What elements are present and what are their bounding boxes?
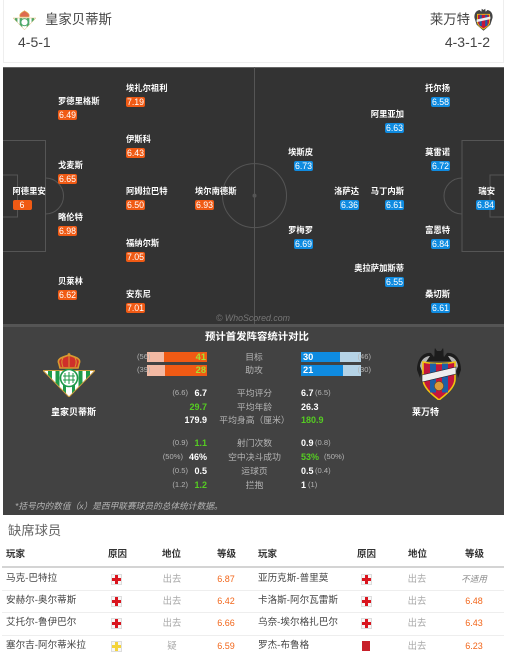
table row 3: 艾托尔-鲁伊巴尔	[6, 617, 76, 628]
table row 1: 马克-巴特拉	[6, 573, 57, 584]
player: 埃扎尔祖利: 7.19	[127, 97, 144, 107]
bar: Levante assists: 21	[303, 365, 313, 375]
player: 奥拉萨加斯蒂: 奥拉萨加斯蒂	[354, 263, 404, 273]
table row 4: 罗杰-布鲁格	[258, 640, 309, 651]
panel: match header	[3, 0, 504, 63]
stat row: average height: 平均身高（厘米）	[219, 415, 290, 425]
stat row: dribbles: 0.5	[301, 466, 314, 476]
player: 桑切斯: 6.61	[432, 303, 449, 313]
player: 洛萨达	[334, 186, 359, 210]
table row 2: 6.48	[465, 596, 483, 606]
player: 阿德里安	[12, 186, 46, 210]
table header: 地位	[162, 549, 181, 560]
stat row: aerial duels	[163, 452, 344, 462]
player: 阿姆拉巴特: 6.50	[127, 200, 144, 210]
table row 1: 不适用	[461, 574, 487, 584]
bar: Levante goals	[301, 352, 361, 362]
player: 莫雷诺: 莫雷诺	[425, 147, 450, 157]
stat row: average height: 179.9	[184, 415, 207, 425]
player: 罗德里格斯	[58, 96, 100, 120]
bar: Levante goals: 30	[303, 352, 313, 362]
player: 罗梅罗: 6.69	[295, 239, 312, 249]
player: 桑切斯: 桑切斯	[425, 289, 450, 299]
table row 4	[6, 640, 483, 652]
watermark: © WhoScored.com	[216, 313, 290, 323]
player: 罗德里格斯: 6.49	[59, 110, 76, 120]
player: 埃尔南德斯	[195, 186, 236, 210]
stat row: tackles	[172, 480, 317, 490]
stat row: shots on target: 0.9	[301, 438, 314, 448]
stat row: average age: 平均年龄	[237, 402, 272, 412]
stat row: average rating: (6.6)	[172, 388, 188, 397]
team name: Betis: 皇家贝蒂斯	[45, 12, 112, 27]
player: 桑切斯	[425, 289, 450, 313]
formation: Levante: 4-3-1-2	[445, 34, 490, 50]
stat row: average rating: 平均评分	[237, 388, 272, 398]
stats title: 预计首发阵容统计对比	[205, 332, 309, 343]
team name: Levante: 莱万特	[430, 12, 470, 27]
player: 埃扎尔祖利: 埃扎尔祖利	[126, 83, 168, 93]
player: 伊斯科: 伊斯科	[126, 134, 151, 144]
player: 托尔扬	[425, 83, 450, 107]
stat row: dribbles: 运球页	[241, 466, 268, 476]
player: 马丁内斯: 6.61	[386, 200, 403, 210]
player: 洛萨达: 6.36	[341, 200, 358, 210]
stat row: goals: 目标	[245, 352, 263, 362]
table header	[2, 548, 504, 568]
stat row: aerial duels: 53%	[301, 452, 319, 462]
pitch markings	[3, 67, 504, 324]
stat row: tackles: 拦抱	[246, 480, 263, 490]
team name: Levante: 莱万特	[412, 407, 439, 417]
stat row: dribbles: (0.4)	[315, 466, 331, 475]
footnote: *括号内的数值（x）是西甲联赛球员的总体统计数据。	[15, 501, 223, 511]
table row 4: 6.59	[217, 641, 235, 651]
player: 安东尼	[126, 289, 151, 313]
stat row: average height: 180.9	[301, 415, 324, 425]
player: 埃扎尔祖利	[126, 83, 168, 107]
player: 略伦特: 6.98	[59, 226, 76, 236]
stat row: tackles: 1.2	[194, 480, 207, 490]
player: 福纳尔斯: 福纳尔斯	[126, 238, 159, 248]
panel: pitch	[3, 67, 504, 325]
player: 贝莱林	[58, 276, 83, 300]
table row 4: 疑	[167, 640, 177, 651]
player: 阿德里安: 6	[20, 200, 24, 210]
icon: Real Betis crest	[43, 353, 95, 397]
player: 阿姆拉巴特: 阿姆拉巴特	[126, 186, 168, 196]
table row 2: 出去	[163, 595, 181, 606]
player: 埃斯皮: 6.73	[295, 161, 312, 171]
row dividers	[2, 590, 504, 636]
table row 2: 出去	[408, 595, 426, 606]
player: 安东尼: 安东尼	[126, 289, 151, 299]
player: 阿德里安: 阿德里安	[12, 186, 46, 196]
stat row: aerial duels: 空中决斗成功	[228, 452, 281, 462]
stat row: tackles: (1)	[308, 480, 317, 489]
stat row: shots on target: 1.1	[194, 438, 207, 448]
player: 阿里亚加: 阿里亚加	[371, 109, 404, 119]
table row 1: 出去	[408, 573, 426, 584]
table row 3: 6.43	[465, 618, 483, 628]
stat row: average age: 29.7	[189, 402, 207, 412]
bar: Betis assists	[147, 365, 207, 376]
stat row: assists: 助攻	[245, 365, 263, 375]
stat row: shots on target	[172, 438, 331, 448]
formation: Betis: 4-5-1	[18, 34, 51, 50]
player: 戈麦斯	[58, 160, 83, 184]
table header: 地位	[408, 549, 427, 560]
stat row: assists: (39)	[137, 365, 151, 374]
icon: Real Betis crest small	[13, 10, 36, 30]
stat row: shots on target: 射门次数	[237, 438, 272, 448]
stat row: tackles: 1	[301, 480, 306, 490]
stat row: average age	[189, 402, 319, 412]
table row 2: 卡洛斯-阿尔瓦雷斯	[258, 595, 338, 606]
player: 富恩特: 富恩特	[425, 225, 450, 235]
stat row: assists	[137, 365, 371, 376]
table row 1: 出去	[163, 573, 181, 584]
icon: Levante crest small	[474, 8, 493, 31]
table row 4: 出去	[408, 640, 426, 651]
stat row: dribbles: 0.5	[194, 466, 207, 476]
table row 1: 亚历克斯-普里莫	[258, 573, 328, 584]
player: 贝莱林: 6.62	[59, 290, 76, 300]
player: 阿里亚加: 6.63	[386, 123, 403, 133]
player: 戈麦斯: 6.65	[59, 174, 76, 184]
stat row: goals: (46)	[357, 352, 371, 361]
player: 罗德里格斯: 罗德里格斯	[58, 96, 100, 106]
stat row: aerial duels: (50%)	[324, 452, 344, 461]
player: 埃尔南德斯: 6.93	[196, 200, 213, 210]
bar: Betis assists: 28	[196, 365, 206, 375]
stat row: average rating: 6.7	[194, 388, 207, 398]
player: 马丁内斯: 马丁内斯	[371, 186, 404, 196]
player: 伊斯科: 6.43	[127, 148, 144, 158]
player: 瑞安	[476, 186, 495, 210]
player: 莫雷诺	[425, 147, 450, 171]
player: 瑞安: 瑞安	[478, 186, 495, 196]
table row 2: 6.42	[217, 596, 235, 606]
player: 富恩特	[425, 225, 450, 249]
table header: 等级	[465, 549, 484, 560]
table header: 原因	[357, 549, 376, 560]
player: 托尔扬: 6.58	[432, 97, 449, 107]
stat row: goals: (56)	[137, 352, 151, 361]
panel: lineup stats comparison	[3, 324, 504, 515]
stat row: goals	[137, 352, 371, 362]
player: 安东尼: 7.01	[127, 303, 144, 313]
player: 伊斯科	[126, 134, 151, 158]
stat row: average age: 26.3	[301, 402, 319, 412]
table header: 玩家	[6, 549, 25, 560]
player: 埃斯皮: 埃斯皮	[288, 147, 313, 157]
player: 略伦特	[58, 212, 83, 236]
player: 阿姆拉巴特	[126, 186, 168, 210]
player: 贝莱林: 贝莱林	[58, 276, 83, 286]
player: 略伦特: 略伦特	[58, 212, 83, 222]
player: 埃尔南德斯: 埃尔南德斯	[195, 186, 236, 196]
table row 2	[6, 594, 483, 607]
stat row: shots on target: (0.8)	[315, 438, 331, 447]
stat row: tackles: (1.2)	[172, 480, 188, 489]
player: 奥拉萨加斯蒂	[354, 263, 404, 287]
bar: Betis goals: 41	[196, 352, 206, 362]
team name: Betis: 皇家贝蒂斯	[51, 407, 96, 417]
stat row: assists: (30)	[357, 365, 371, 374]
table row 3: 出去	[163, 617, 181, 628]
stat row: aerial duels: (50%)	[163, 452, 183, 461]
player: 福纳尔斯: 7.05	[127, 252, 144, 262]
heading: missing players: 缺席球员	[8, 523, 61, 538]
table row 3	[6, 616, 483, 629]
table row 4: 塞尔吉-阿尔蒂米拉	[6, 640, 86, 651]
player: 奥拉萨加斯蒂: 6.55	[386, 277, 403, 287]
table row 1	[6, 572, 488, 585]
player: 洛萨达: 洛萨达	[334, 186, 359, 196]
table row 1: 6.87	[217, 574, 235, 584]
table row 2: 安赫尔-奥尔蒂斯	[6, 595, 76, 606]
table row 3: 乌奈-埃尔格扎巴尔	[258, 617, 338, 628]
player: 福纳尔斯	[126, 238, 159, 262]
table header: 玩家	[258, 549, 277, 560]
bar: Levante assists	[301, 365, 361, 376]
stat row: dribbles: (0.5)	[172, 466, 188, 475]
player: 托尔扬: 托尔扬	[425, 83, 450, 93]
table row 4: 6.23	[465, 641, 483, 651]
stat row: average rating	[172, 388, 331, 398]
stat row: average rating: 6.7	[301, 388, 314, 398]
player: 马丁内斯	[371, 186, 404, 210]
player: 罗梅罗: 罗梅罗	[288, 225, 313, 235]
table row 3: 出去	[408, 617, 426, 628]
player: 富恩特: 6.84	[432, 239, 449, 249]
table row 3: 6.66	[217, 618, 235, 628]
player: 埃斯皮	[288, 147, 313, 171]
player: 阿里亚加	[371, 109, 404, 133]
stat row: aerial duels: 46%	[189, 452, 207, 462]
icon: Levante crest	[417, 348, 461, 400]
stat row: average rating: (6.5)	[315, 388, 331, 397]
player: 戈麦斯: 戈麦斯	[58, 160, 83, 170]
player: 莫雷诺: 6.72	[432, 161, 449, 171]
player: 罗梅罗	[288, 225, 313, 249]
stat row: shots on target: (0.9)	[172, 438, 188, 447]
table header: 原因	[108, 549, 127, 560]
bar: Betis goals	[147, 352, 207, 362]
player: 瑞安: 6.84	[477, 200, 494, 210]
stat row: dribbles	[172, 466, 331, 476]
stat row: average height	[184, 415, 324, 425]
table header: 等级	[217, 549, 236, 560]
